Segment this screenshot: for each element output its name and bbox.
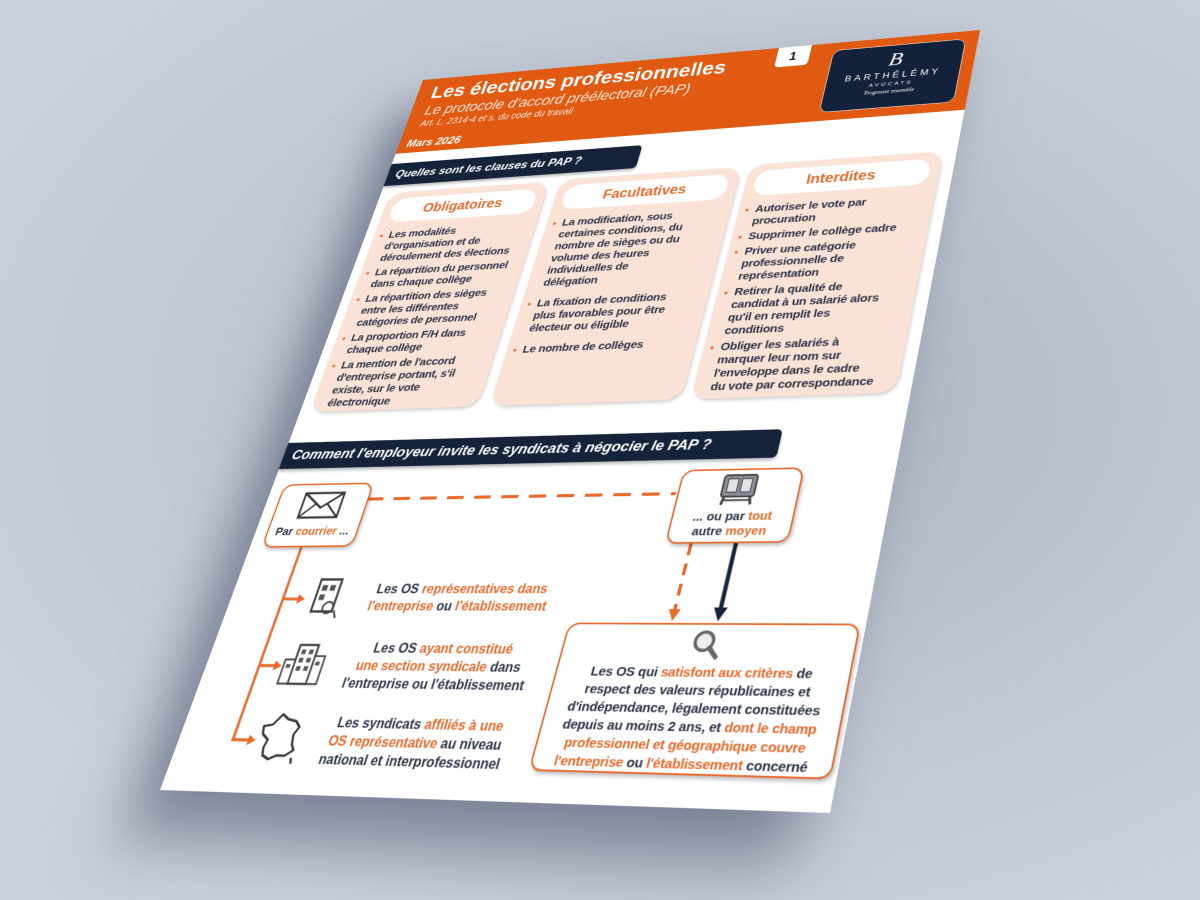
icon: France map [260,712,302,765]
panel: facultatives: nombre de sièges ou du [553,233,681,252]
box: critères: professionnel et géographique couvre [562,735,807,757]
panel: facultatives: plus favorables pour être [532,304,667,322]
item 3: syndicats affiliés: Les syndicats affiliés à une [335,716,505,734]
icon: voting machine [718,474,760,506]
article reference: Art. L. 2314-4 et s. du code du travail [419,106,574,128]
date: Mars 2026 [405,134,463,150]
panel: obligatoires: La répartition du personnel [373,259,510,278]
section heading 2 [279,429,783,469]
arrow: dashed orange [668,543,693,622]
panel: interdites: Interdites [805,168,877,187]
panel: interdites: candidat à un salarié alors [730,292,880,311]
icon: magnifier [692,630,718,660]
logo: Progresser ensemble [864,86,915,96]
section heading 1 [384,145,642,186]
panel: interdites: Supprimer le collège cadre [747,222,898,242]
logo: AVOCATS [868,79,913,88]
panel: obligatoires: d'organisation et de [383,235,482,252]
panel: facultatives: individuelles de [546,260,630,276]
panel: obligatoires: dans chaque collège [369,273,474,290]
panel: interdites: représentation [737,266,820,283]
item 1: OS représentatives: Les OS représentatives dans [375,582,549,597]
panel: obligatoires: chaque collège [345,341,424,356]
box: critères: l'entreprise ou l'établissement concerné [552,753,809,776]
subtitle: Le protocole d'accord préélectoral (PAP) [423,81,693,118]
box: autre moyen [665,467,805,544]
item 3: syndicats affiliés: national et interprofessionnel [316,752,502,773]
panel: facultatives: Facultatives [601,182,688,202]
panel: interdites: professionnelle de [740,252,845,270]
item 1: OS représentatives [309,578,549,619]
panel: interdites: Priver une catégorie [743,239,857,257]
item 3: syndicats affiliés [260,712,505,773]
panel: obligatoires: existe, sur le vote [330,381,422,397]
arrow: solid navy [714,543,739,622]
panel: obligatoires: La mention de l'accord [339,355,457,371]
panel: interdites: Obliger les salariés à [719,336,840,353]
panel: facultatives: électeur ou éligible [528,318,630,334]
box: critères: respect des valeurs républicaines et [583,682,812,700]
panel: interdites: Autoriser le vote par [754,196,867,215]
page number badge: 1 [788,50,798,63]
item 2: section syndicale: une section syndicale dans [354,659,522,675]
logo: BARTHÉLÉMY [844,66,942,83]
panel: obligatoires: Obligatoires [421,196,504,215]
item 2: section syndicale [276,642,526,694]
item 3: syndicats affiliés: OS représentative au niveau [326,734,503,753]
box: par courrier [261,482,374,548]
box: autre moyen: autre moyen [690,524,768,539]
box: par courrier: Par courrier ... [273,524,351,538]
icon: buildings [276,643,327,686]
item 1: OS représentatives: l'entreprise ou l'établissement [365,600,548,614]
box: critères: d'indépendance, légalement constituées [566,699,822,719]
panel: interdites: qu'il en remplit les [726,307,831,324]
panel: obligatoires: catégories de personnel [355,311,478,329]
icon: ballot document [309,578,344,619]
panel: obligatoires: La répartition des sièges [364,287,489,305]
panel: obligatoires: électronique [326,395,392,409]
panel: obligatoires [310,182,549,412]
panel: interdites: marquer leur nom sur [716,349,842,366]
panel: facultatives: Le nombre de collèges [521,338,645,356]
box: critères: depuis au moins 2 ans, et dont le champ [561,717,818,738]
panel: facultatives: certaines conditions, du [557,221,684,240]
logo: B [887,48,905,70]
panel: interdites: Retirer la qualité de [733,281,844,298]
panel: interdites: conditions [723,322,785,337]
panel: facultatives: volume des heures [549,247,651,264]
panel: interdites: l'enveloppe dans le cadre [712,362,861,380]
panel: obligatoires: déroulement des élections [378,245,511,264]
box: autre moyen: ... ou par tout [691,509,774,524]
section heading 1: Quelles sont les clauses du PAP ? [394,154,583,180]
panel: obligatoires: entre les différentes [359,300,461,317]
panel: interdites [690,151,943,399]
flow connectors [230,492,676,746]
header band [396,30,980,154]
item 2: section syndicale: l'entreprise ou l'établissement [340,677,526,694]
panel: facultatives: La modification, sous [561,210,674,228]
panel: obligatoires: d'entreprise portant, s'il [335,367,457,384]
box: critères [528,623,861,780]
page number badge [774,45,812,68]
panel: facultatives [489,167,741,406]
logo [819,39,966,113]
page document [160,30,980,813]
box: critères: Les OS qui satisfont aux critères de [589,664,814,682]
item 2: section syndicale: Les OS ayant constitué [371,642,515,657]
panel: facultatives: délégation [542,274,599,289]
panel: interdites: du vote par correspondance [709,375,875,393]
panel: interdites: procuration [751,212,817,227]
title: Les élections professionnelles [428,57,729,103]
panel: facultatives: La fixation de conditions [535,291,668,309]
panel: obligatoires: Les modalités [387,225,458,241]
panel: obligatoires: La proportion F/H dans [349,327,468,344]
section heading 2: Comment l'employeur invite les syndicats à négocier le PAP ? [289,437,713,463]
icon: envelope [296,491,347,520]
